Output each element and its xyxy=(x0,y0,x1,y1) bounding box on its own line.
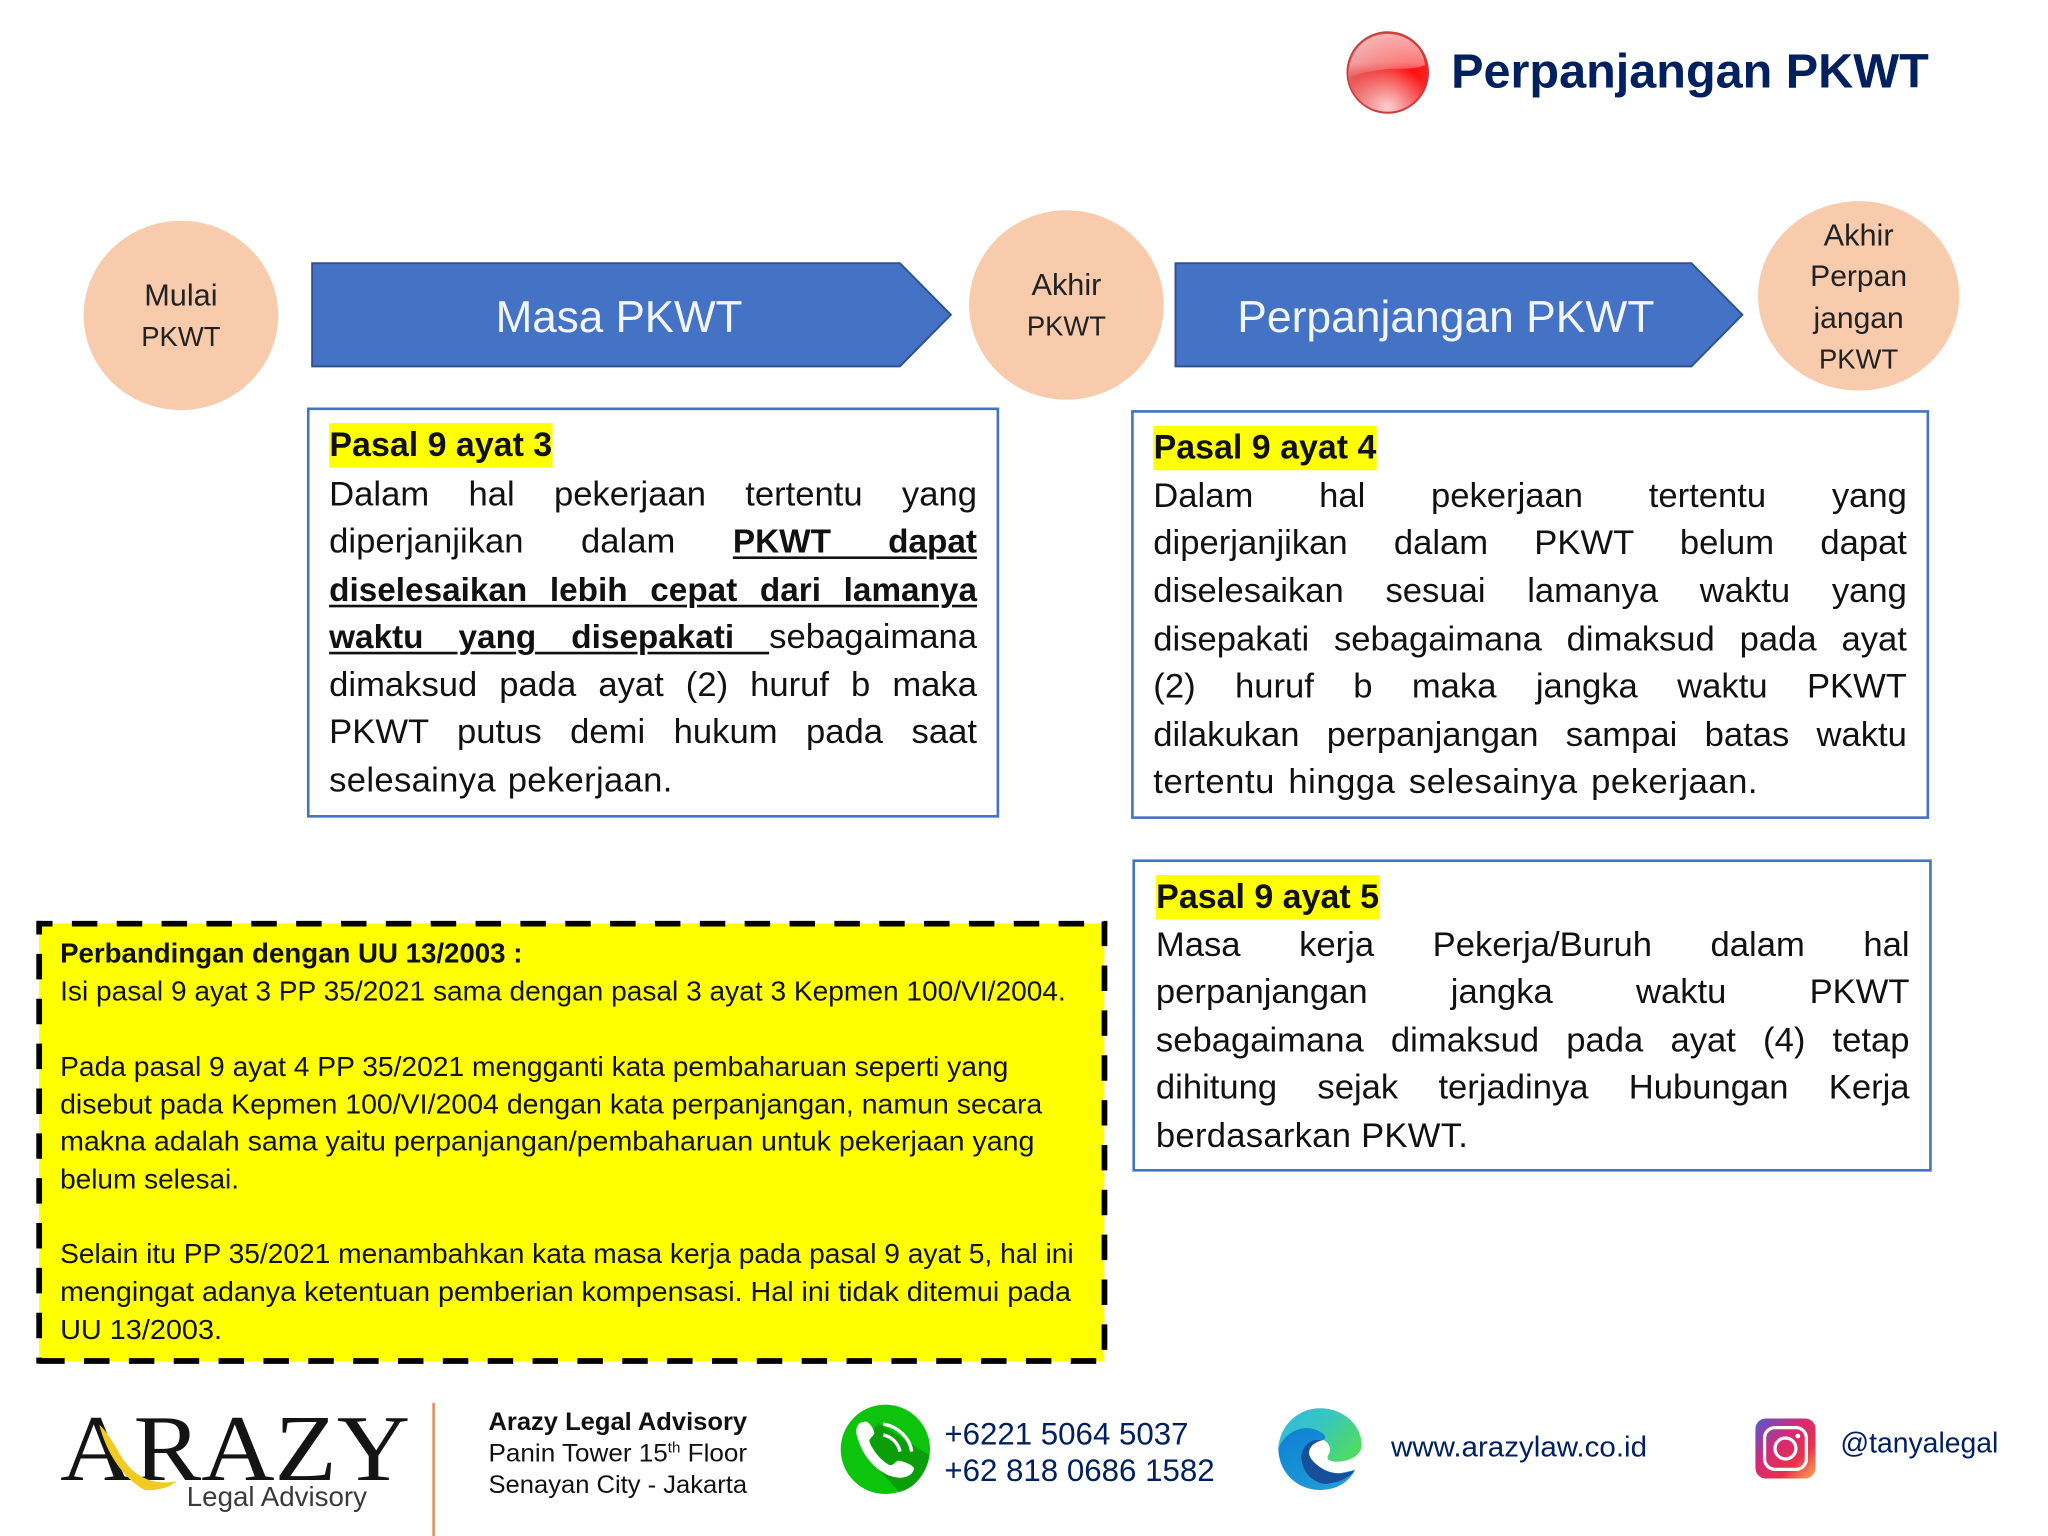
panel: Perbandingan dengan UU 13/2003 xyxy=(36,31,1911,1364)
panel: Perbandingan dengan UU 13/2003: UU 13/2003. xyxy=(60,1314,222,1345)
text: instagram handle: @tanyalegal xyxy=(1840,1427,1998,1459)
text block: address: Arazy Legal Advisory xyxy=(488,1409,747,1436)
text block: address xyxy=(488,1409,748,1499)
text block: phone numbers: +6221 5064 5037 xyxy=(944,1417,1189,1452)
text block: pasal 9 ayat 4 body: (2) huruf b maka jangka waktu PKWT xyxy=(1153,666,1907,705)
text block: pasal 9 ayat 3 body: Dalam hal pekerjaan tertentu yang xyxy=(329,474,977,513)
arrow: Perpanjangan PKWT xyxy=(1174,262,1744,368)
node: Akhir Perpanjangan PKWT: PKWT xyxy=(1819,345,1898,375)
node: Akhir Perpanjangan PKWT: Akhir xyxy=(1824,218,1894,252)
node: Mulai PKWT: PKWT xyxy=(141,323,221,353)
text block: pasal 9 ayat 5 body xyxy=(1156,925,1910,1155)
heading: Pasal 9 ayat 3: Pasal 9 ayat 3 xyxy=(329,424,552,464)
text block: pasal 9 ayat 4 body xyxy=(1153,475,1907,801)
text block: address: th xyxy=(668,1440,680,1456)
text block: pasal 9 ayat 4 body: diperjanjikan dalam PKWT belum dapat xyxy=(1153,522,1907,562)
node: Akhir Perpanjangan PKWT xyxy=(1758,201,1959,391)
divider: footer xyxy=(432,1403,434,1536)
text: website: www.arazylaw.co.id xyxy=(1390,1431,1647,1463)
panel: Perbandingan dengan UU 13/2003: belum selesai. xyxy=(60,1164,239,1195)
text block: pasal 9 ayat 3 body: dimaksud pada ayat (2) huruf b maka xyxy=(329,665,977,704)
node: Akhir Perpanjangan PKWT: jangan xyxy=(1813,300,1904,334)
panel: Perbandingan dengan UU 13/2003: Pada pasal 9 ayat 4 PP 35/2021 mengganti kata pembaharuan seperti yang xyxy=(60,1051,1008,1082)
heading: Pasal 9 ayat 5: Pasal 9 ayat 5 xyxy=(1156,876,1379,915)
icon: red sphere xyxy=(1346,31,1429,114)
text block: pasal 9 ayat 5 body: perpanjangan jangka waktu PKWT xyxy=(1156,972,1910,1011)
text block: pasal 9 ayat 5 body: berdasarkan PKWT. xyxy=(1156,1115,1468,1155)
text block: pasal 9 ayat 4 body: Dalam hal pekerjaan tertentu yang xyxy=(1153,475,1907,515)
panel: Perbandingan dengan UU 13/2003: Isi pasal 9 ayat 3 PP 35/2021 sama dengan pasal 3 ayat 3 Kepmen 100/VI/2004. xyxy=(60,975,1066,1006)
text block: address: Panin Tower 15 xyxy=(488,1441,659,1468)
text block: pasal 9 ayat 4 body: diselesaikan sesuai lamanya waktu yang xyxy=(1153,571,1907,610)
heading: Pasal 9 ayat 4: Pasal 9 ayat 4 xyxy=(1154,426,1376,466)
node: Mulai PKWT xyxy=(84,221,278,410)
panel: Perbandingan dengan UU 13/2003: Selain itu PP 35/2021 menambahkan kata masa kerja pada pasal 9 ayat 5, hal ini xyxy=(60,1238,1074,1269)
icon: edge browser xyxy=(1278,1408,1362,1490)
text block: address: Senayan City - Jakarta xyxy=(488,1472,747,1499)
text block: pasal 9 ayat 4 body: dilakukan perpanjangan sampai batas waktu xyxy=(1153,714,1907,754)
text block: pasal 9 ayat 3 body: PKWT putus demi hukum pada saat xyxy=(329,712,977,751)
arrow: Masa PKWT: Masa PKWT xyxy=(496,293,743,342)
text block: phone numbers xyxy=(944,1417,1766,1488)
text block: pasal 9 ayat 5 body: Masa kerja Pekerja/Buruh dalam hal xyxy=(1156,925,1910,964)
panel: Perbandingan dengan UU 13/2003: mengingat adanya ketentuan pemberian kompensasi. Hal ini tidak ditemui pada xyxy=(60,1276,1072,1307)
icon: phone xyxy=(840,1404,930,1494)
text block: pasal 9 ayat 5 body: sebagaimana dimaksud pada ayat (4) tetap xyxy=(1156,1020,1910,1059)
text block: pasal 9 ayat 3 body: selesainya pekerjaan. xyxy=(329,760,673,799)
text block: address: Floor xyxy=(680,1441,747,1468)
node: Akhir Perpanjangan PKWT: Perpan xyxy=(1810,259,1907,293)
logo: Arazy Legal Advisory: ARAZY xyxy=(60,1397,410,1501)
panel: Perbandingan dengan UU 13/2003: disebut pada Kepmen 100/VI/2004 dengan kata perpanjangan, namun secara xyxy=(60,1088,1043,1119)
text block: pasal 9 ayat 3 body xyxy=(329,474,978,799)
node: Mulai PKWT: Mulai xyxy=(144,278,218,312)
text block: pasal 9 ayat 4 body: tertentu hingga selesainya pekerjaan. xyxy=(1153,761,1758,801)
node: Akhir PKWT: PKWT xyxy=(1027,312,1106,342)
text block: pasal 9 ayat 3 body: diselesaikan lebih cepat dari lamanya xyxy=(329,572,977,609)
arrow: Perpanjangan PKWT: Perpanjangan PKWT xyxy=(1237,293,1654,342)
title: Perpanjangan PKWT xyxy=(1451,43,1929,98)
arrow: Masa PKWT xyxy=(311,262,952,368)
text block: pasal 9 ayat 4 body: disepakati sebagaimana dimaksud pada ayat xyxy=(1153,619,1907,658)
node: Akhir PKWT: Akhir xyxy=(1031,268,1101,302)
icon: instagram xyxy=(1755,1418,1816,1478)
panel: Pasal 9 ayat 5 xyxy=(1132,859,1932,1172)
text block: phone numbers: +62 818 0686 1582 xyxy=(944,1453,1215,1488)
text block: pasal 9 ayat 3 body: diperjanjikan dalam PKWT dapat xyxy=(329,521,977,560)
node: Akhir PKWT xyxy=(969,210,1164,400)
panel: Pasal 9 ayat 4 xyxy=(1131,410,1929,819)
logo: Arazy Legal Advisory xyxy=(60,1397,436,1536)
panel: Perbandingan dengan UU 13/2003: makna adalah sama yaitu perpanjangan/pembaharuan untuk pekerjaan yang xyxy=(60,1126,1034,1157)
text block: pasal 9 ayat 5 body: dihitung sejak terjadinya Hubungan Kerja xyxy=(1156,1067,1910,1106)
logo: Arazy Legal Advisory: Legal Advisory xyxy=(187,1481,367,1512)
panel: Perbandingan dengan UU 13/2003: Perbandingan dengan UU 13/2003 : xyxy=(60,938,522,969)
text block: pasal 9 ayat 3 body: waktu yang disepakati sebagaimana xyxy=(329,616,977,656)
panel: Pasal 9 ayat 3 xyxy=(307,408,999,818)
